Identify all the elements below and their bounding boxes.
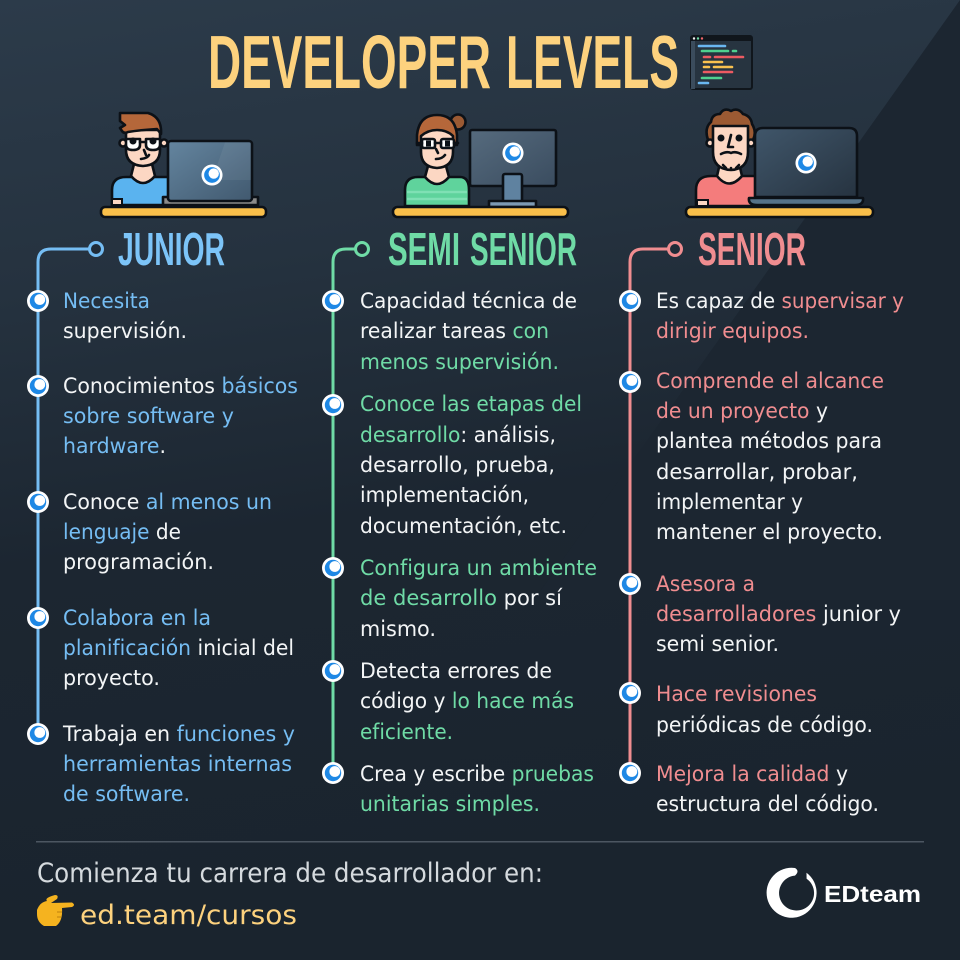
neck and head bbox=[425, 166, 449, 184]
item bbox=[63, 606, 294, 690]
monitor bbox=[470, 130, 556, 186]
item bbox=[656, 289, 904, 343]
item: implementar y bbox=[656, 490, 803, 514]
laptop bbox=[755, 128, 857, 197]
item bbox=[63, 374, 298, 458]
item: desarrolladores junior y bbox=[656, 602, 901, 626]
face bbox=[706, 140, 714, 146]
heading: JUNIOR bbox=[118, 223, 225, 275]
item bbox=[656, 369, 884, 544]
item: plantea métodos para bbox=[656, 429, 882, 453]
item: realizar tareas con bbox=[360, 319, 549, 343]
heading: SENIOR bbox=[470, 223, 577, 275]
timeline bbox=[27, 242, 102, 745]
item: Colabora en la bbox=[63, 606, 211, 630]
item bbox=[656, 762, 879, 816]
item: menos supervisión. bbox=[360, 350, 559, 374]
item: unitarias simples. bbox=[360, 792, 540, 816]
item: Mejora la calidad y bbox=[656, 762, 848, 786]
panel: semi senior bbox=[322, 223, 597, 816]
illustration: senior developer bbox=[686, 110, 873, 217]
item bbox=[656, 572, 901, 656]
item: desarrollar, probar, bbox=[656, 460, 858, 484]
item: Conoce las etapas del bbox=[360, 392, 582, 416]
item: periódicas de código. bbox=[656, 713, 873, 737]
item bbox=[62, 722, 295, 806]
item: Capacidad técnica de bbox=[360, 289, 577, 313]
desk bbox=[686, 207, 873, 217]
illustration: semi senior developer bbox=[393, 114, 568, 217]
item: de software. bbox=[63, 782, 190, 806]
neck bbox=[717, 163, 742, 184]
shirt bbox=[112, 177, 170, 205]
laptop bbox=[163, 197, 258, 205]
title: DEVELOPER bbox=[208, 20, 491, 104]
footer link: ed.team/cursos bbox=[80, 900, 297, 931]
item: de un proyecto y bbox=[656, 399, 828, 423]
item: Trabaja en funciones y bbox=[62, 722, 295, 746]
item: programación. bbox=[63, 550, 214, 574]
item: Conoce al menos un bbox=[63, 490, 272, 514]
heading: SEMI bbox=[388, 223, 460, 275]
shirt bbox=[696, 176, 757, 206]
footer text: Comienza tu carrera de desarrollador en: bbox=[37, 858, 543, 889]
item: Configura un ambiente bbox=[360, 556, 597, 580]
item: desarrollo, prueba, bbox=[360, 453, 555, 477]
hair bbox=[707, 110, 755, 146]
heading: SENIOR bbox=[698, 223, 806, 275]
item: código y lo hace más bbox=[360, 689, 574, 713]
item: herramientas internas bbox=[63, 752, 292, 776]
item: Hace revisiones bbox=[656, 682, 817, 706]
item: dirigir equipos. bbox=[656, 319, 809, 343]
item: mismo. bbox=[360, 617, 436, 641]
item: hardware. bbox=[63, 434, 166, 458]
item: desarrollo: análisis, bbox=[360, 423, 556, 447]
item: mantener el proyecto. bbox=[656, 520, 883, 544]
item: Comprende el alcance bbox=[656, 369, 884, 393]
item: Conocimientos básicos bbox=[63, 374, 298, 398]
item: Detecta errores de bbox=[360, 659, 552, 683]
item bbox=[63, 490, 272, 574]
glasses bbox=[422, 139, 435, 148]
item bbox=[360, 289, 577, 374]
item: Crea y escribe pruebas bbox=[360, 762, 594, 786]
item: semi senior. bbox=[656, 632, 779, 656]
bun and hair bbox=[450, 114, 466, 130]
neck and head bbox=[131, 164, 155, 183]
item bbox=[360, 556, 597, 641]
item: planificación inicial del bbox=[63, 636, 294, 660]
glasses bbox=[120, 140, 126, 146]
item: implementación, bbox=[360, 483, 529, 507]
desk bbox=[393, 207, 568, 217]
icon: code window bbox=[691, 36, 752, 89]
item: estructura del código. bbox=[656, 792, 879, 816]
panel: junior bbox=[27, 223, 298, 806]
item: documentación, etc. bbox=[360, 514, 567, 538]
illustration: junior developer bbox=[101, 113, 266, 217]
item bbox=[656, 682, 873, 737]
panel: senior bbox=[619, 223, 904, 816]
desk bbox=[101, 207, 266, 217]
item bbox=[63, 289, 187, 343]
logo: EDteam bbox=[767, 868, 921, 918]
shirt bbox=[405, 177, 469, 206]
heading bbox=[388, 223, 577, 275]
item: sobre software y bbox=[63, 404, 234, 428]
item: Asesora a bbox=[656, 572, 755, 596]
title: LEVELS bbox=[506, 20, 679, 104]
item: Es capaz de supervisar y bbox=[656, 289, 904, 313]
item: proyecto. bbox=[63, 666, 160, 690]
item bbox=[360, 659, 574, 744]
icon: pointing hand bbox=[37, 895, 74, 926]
item bbox=[360, 762, 594, 816]
item: lenguaje de bbox=[63, 520, 181, 544]
item bbox=[360, 392, 582, 538]
item: de desarrollo por sí bbox=[360, 586, 563, 610]
item: Necesita bbox=[63, 289, 150, 313]
logo: EDteam: EDteam bbox=[824, 881, 921, 907]
item: supervisión. bbox=[63, 319, 187, 343]
item: eficiente. bbox=[360, 720, 453, 744]
timeline bbox=[619, 242, 682, 784]
timeline bbox=[322, 242, 368, 784]
